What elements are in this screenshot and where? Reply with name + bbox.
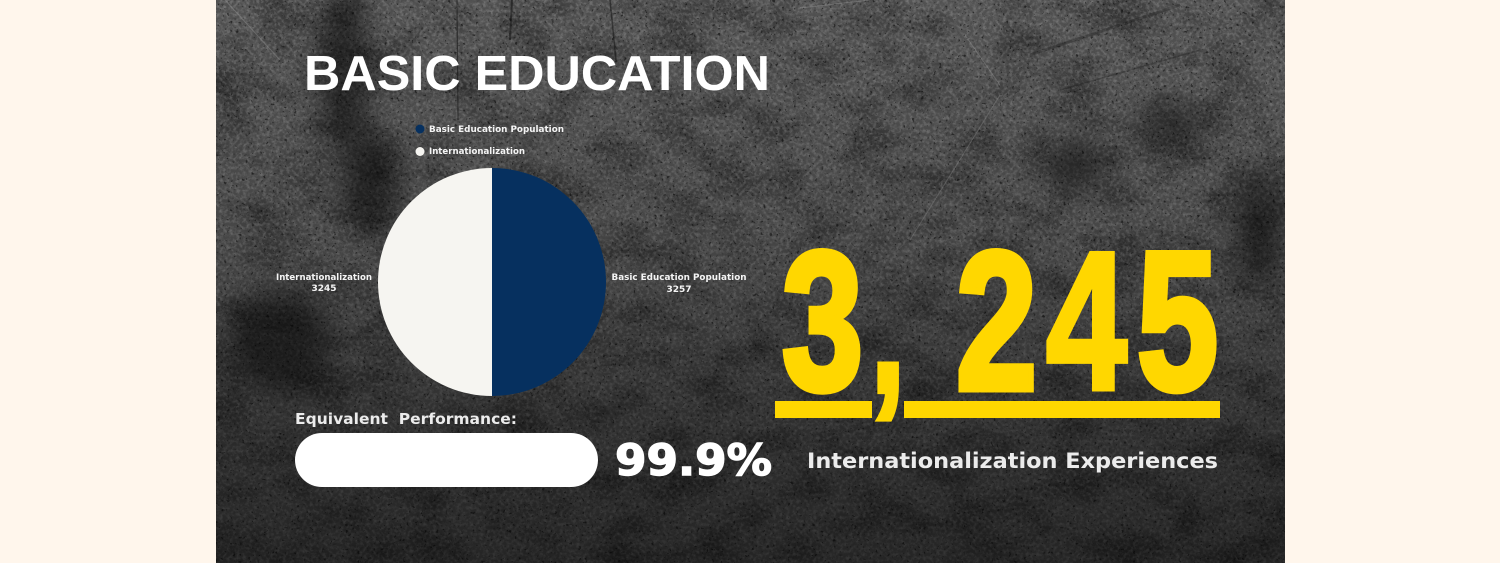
big number: 3, 245: 4 (1046, 211, 1127, 431)
performance value: 99.9% (615, 436, 772, 486)
chart legend (416, 124, 564, 157)
performance label: Equivalent Performance: (295, 410, 517, 428)
big number: 3, 245: , (871, 231, 905, 429)
pie label: basic education population: Basic Education Population (612, 273, 746, 283)
panel: textured dark background (216, 0, 1285, 563)
pie chart (378, 168, 606, 396)
pie slice: internationalization (378, 168, 492, 396)
legend item: basic education population: Basic Education Population (429, 125, 564, 135)
big number: 3, 245: 5 (1137, 211, 1218, 431)
pie slice: basic education population (492, 168, 606, 396)
underline segments (775, 401, 872, 418)
title: BASIC EDUCATION (304, 47, 770, 101)
big number: 3, 245 (775, 211, 1220, 431)
caption: internationalization experiences: Internationalization Experiences (807, 449, 1218, 473)
pie label: internationalization: 3245 (311, 284, 337, 294)
performance bar (295, 433, 598, 487)
pie label: internationalization: Internationalization (276, 273, 372, 283)
pie label: basic education population: 3257 (666, 285, 692, 295)
legend item: internationalization: Internationalization (429, 147, 525, 157)
big number: 3, 245: 2 (956, 211, 1037, 431)
infographic canvas (216, 0, 1285, 563)
big number: 3, 245: 3 (782, 211, 863, 431)
